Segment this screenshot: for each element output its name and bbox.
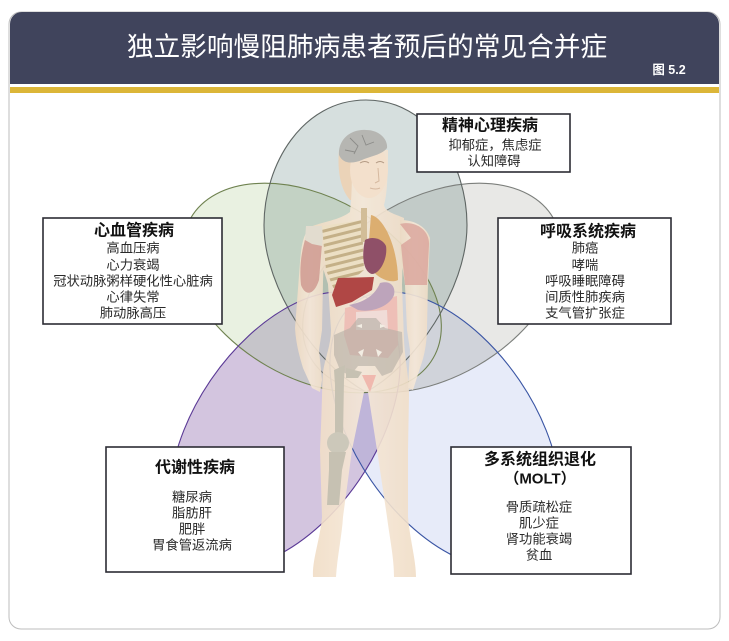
items [506, 500, 572, 562]
petal: metabolic [123, 251, 447, 609]
left arm [295, 227, 325, 392]
petal: psychiatric [264, 100, 467, 392]
panel: multi-organ [451, 447, 631, 574]
items: 哮喘 [572, 256, 598, 272]
rib cage [322, 220, 364, 292]
stomach [349, 282, 394, 311]
body silhouette [295, 150, 430, 577]
items [53, 240, 213, 320]
items [448, 138, 542, 168]
items: 肌少症 [519, 516, 559, 530]
items [152, 490, 232, 552]
items: 心律失常 [106, 290, 160, 304]
petal: multi-organ [283, 251, 607, 609]
petal: cardiovascular [146, 140, 478, 436]
heart [363, 238, 386, 274]
pelvis [334, 318, 403, 376]
femur and knee [334, 365, 362, 437]
items: 呼吸睡眠障碍 [545, 274, 625, 288]
items: 肾功能衰竭 [506, 530, 572, 546]
panel: metabolic [106, 447, 284, 572]
face [350, 142, 388, 198]
items: 糖尿病 [172, 490, 212, 504]
items: 认知障碍 [467, 152, 521, 168]
items: 抑郁症，焦虑症 [448, 138, 542, 152]
items: 心力衰竭 [106, 256, 160, 272]
heading: 呼吸系统疾病 [540, 222, 636, 240]
header: title banner [10, 12, 719, 84]
petal outlines [123, 100, 607, 609]
right arm [400, 220, 430, 390]
reproductive region [362, 375, 376, 392]
overlapping petals diagram [178, 100, 554, 555]
panel: cardiovascular [43, 218, 222, 324]
items: 冠状动脉粥样硬化性心脏病 [53, 272, 213, 288]
items [545, 240, 625, 320]
title: 独立影响慢阻肺病患者预后的常见合并症 [127, 32, 607, 62]
items: 脂肪肝 [172, 506, 212, 520]
gold divider [10, 87, 719, 93]
items: 肺动脉高压 [100, 304, 166, 320]
items: 肺癌 [572, 240, 598, 256]
heading: 代谢性疾病 [155, 458, 235, 476]
left arm muscles [300, 234, 322, 293]
panel: respiratory [498, 218, 671, 324]
items: 高血压病 [106, 240, 160, 256]
items: 贫血 [526, 548, 552, 562]
items: 支气管扩张症 [545, 306, 625, 320]
figure number: 图 5.2 [652, 63, 686, 77]
items: 胃食管返流病 [152, 536, 232, 552]
petal: respiratory [266, 140, 598, 436]
lung [369, 215, 398, 281]
central overlap tint [240, 293, 442, 388]
right arm muscles [400, 223, 429, 285]
heading: 多系统组织退化 [484, 450, 596, 468]
panel: psychiatric [417, 114, 570, 172]
items: 间质性肺疾病 [545, 290, 625, 304]
intestines [344, 296, 398, 358]
human body anatomy figure [295, 130, 430, 577]
liver [332, 277, 374, 307]
items: 肥胖 [179, 522, 205, 536]
heading: 心血管疾病 [94, 220, 174, 240]
lower-leg bones [327, 452, 346, 505]
icon: brain [339, 130, 387, 163]
heading: 精神心理疾病 [442, 116, 538, 134]
items: 骨质疏松症 [506, 500, 572, 514]
spine [361, 208, 367, 242]
panel: multi-organ: （MOLT） [504, 470, 576, 488]
